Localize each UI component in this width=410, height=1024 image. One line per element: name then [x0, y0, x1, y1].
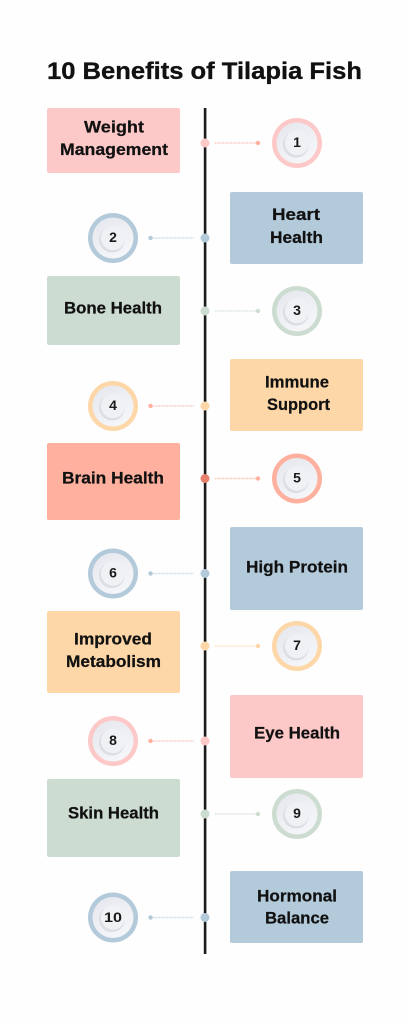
connector and badge 7: 7	[293, 637, 301, 653]
panel: benefit 5 brain health	[47, 443, 180, 520]
connector and badge 9: 9	[293, 805, 301, 821]
connector and badge 7	[200, 621, 322, 671]
panel: benefit 4 immune support	[230, 359, 363, 431]
panel: benefit 1 weight management	[47, 108, 180, 173]
connector and badge 5: 5	[293, 470, 301, 486]
panel: benefit 7 improved metabolism: Metabolism	[66, 652, 161, 671]
connector and badge 6: 6	[109, 564, 117, 580]
panel: benefit 5 brain health: Brain Health	[62, 468, 164, 488]
connector and badge 3: 3	[293, 302, 301, 318]
panel: benefit 1 weight management: Weight	[84, 118, 144, 136]
connector and badge 8: 8	[109, 732, 117, 748]
panel: benefit 2 heart health: Health	[270, 228, 323, 247]
connector and badge 10: 10	[104, 909, 122, 925]
panel: benefit 8 eye health	[230, 695, 363, 778]
connector and badge 9	[200, 789, 322, 839]
panel: benefit 3 bone health: Bone Health	[64, 298, 162, 318]
timeline axis	[204, 108, 206, 954]
panel: benefit 7 improved metabolism: Improved	[74, 630, 152, 648]
panel: benefit 9 skin health: Skin Health	[68, 804, 159, 822]
connector and badge 2: 2	[109, 229, 117, 245]
panel: benefit 2 heart health	[230, 192, 363, 264]
panel: benefit 9 skin health	[47, 779, 180, 857]
panel: benefit 7 improved metabolism	[47, 611, 180, 693]
connector and badge 10	[88, 892, 210, 942]
panel: benefit 10 hormonal balance: Hormonal	[257, 886, 337, 906]
panel: benefit 6 high protein: High Protein	[246, 558, 348, 576]
connector and badge 5	[200, 454, 322, 504]
panel: benefit 6 high protein	[230, 527, 363, 610]
connector and badge 4: 4	[109, 397, 117, 413]
connector and badge 4	[88, 381, 210, 431]
panel: benefit 3 bone health	[47, 276, 180, 345]
panel: benefit 2 heart health: Heart	[272, 205, 320, 224]
connector and badge 2	[88, 213, 210, 263]
connector and badge 6	[88, 548, 210, 598]
panel: benefit 10 hormonal balance: Balance	[265, 908, 329, 928]
connector and badge 3	[200, 286, 322, 336]
panel: benefit 8 eye health: Eye Health	[254, 724, 340, 742]
connector and badge 8	[88, 716, 210, 766]
title: 10 Benefits of Tilapia Fish	[47, 58, 362, 85]
panel: benefit 1 weight management: Management	[60, 140, 168, 159]
panel: benefit 4 immune support: Immune	[265, 372, 329, 392]
panel: benefit 10 hormonal balance	[230, 871, 363, 943]
connector and badge 1	[200, 118, 322, 168]
connector and badge 1: 1	[293, 134, 301, 150]
panel: benefit 4 immune support: Support	[267, 395, 330, 414]
